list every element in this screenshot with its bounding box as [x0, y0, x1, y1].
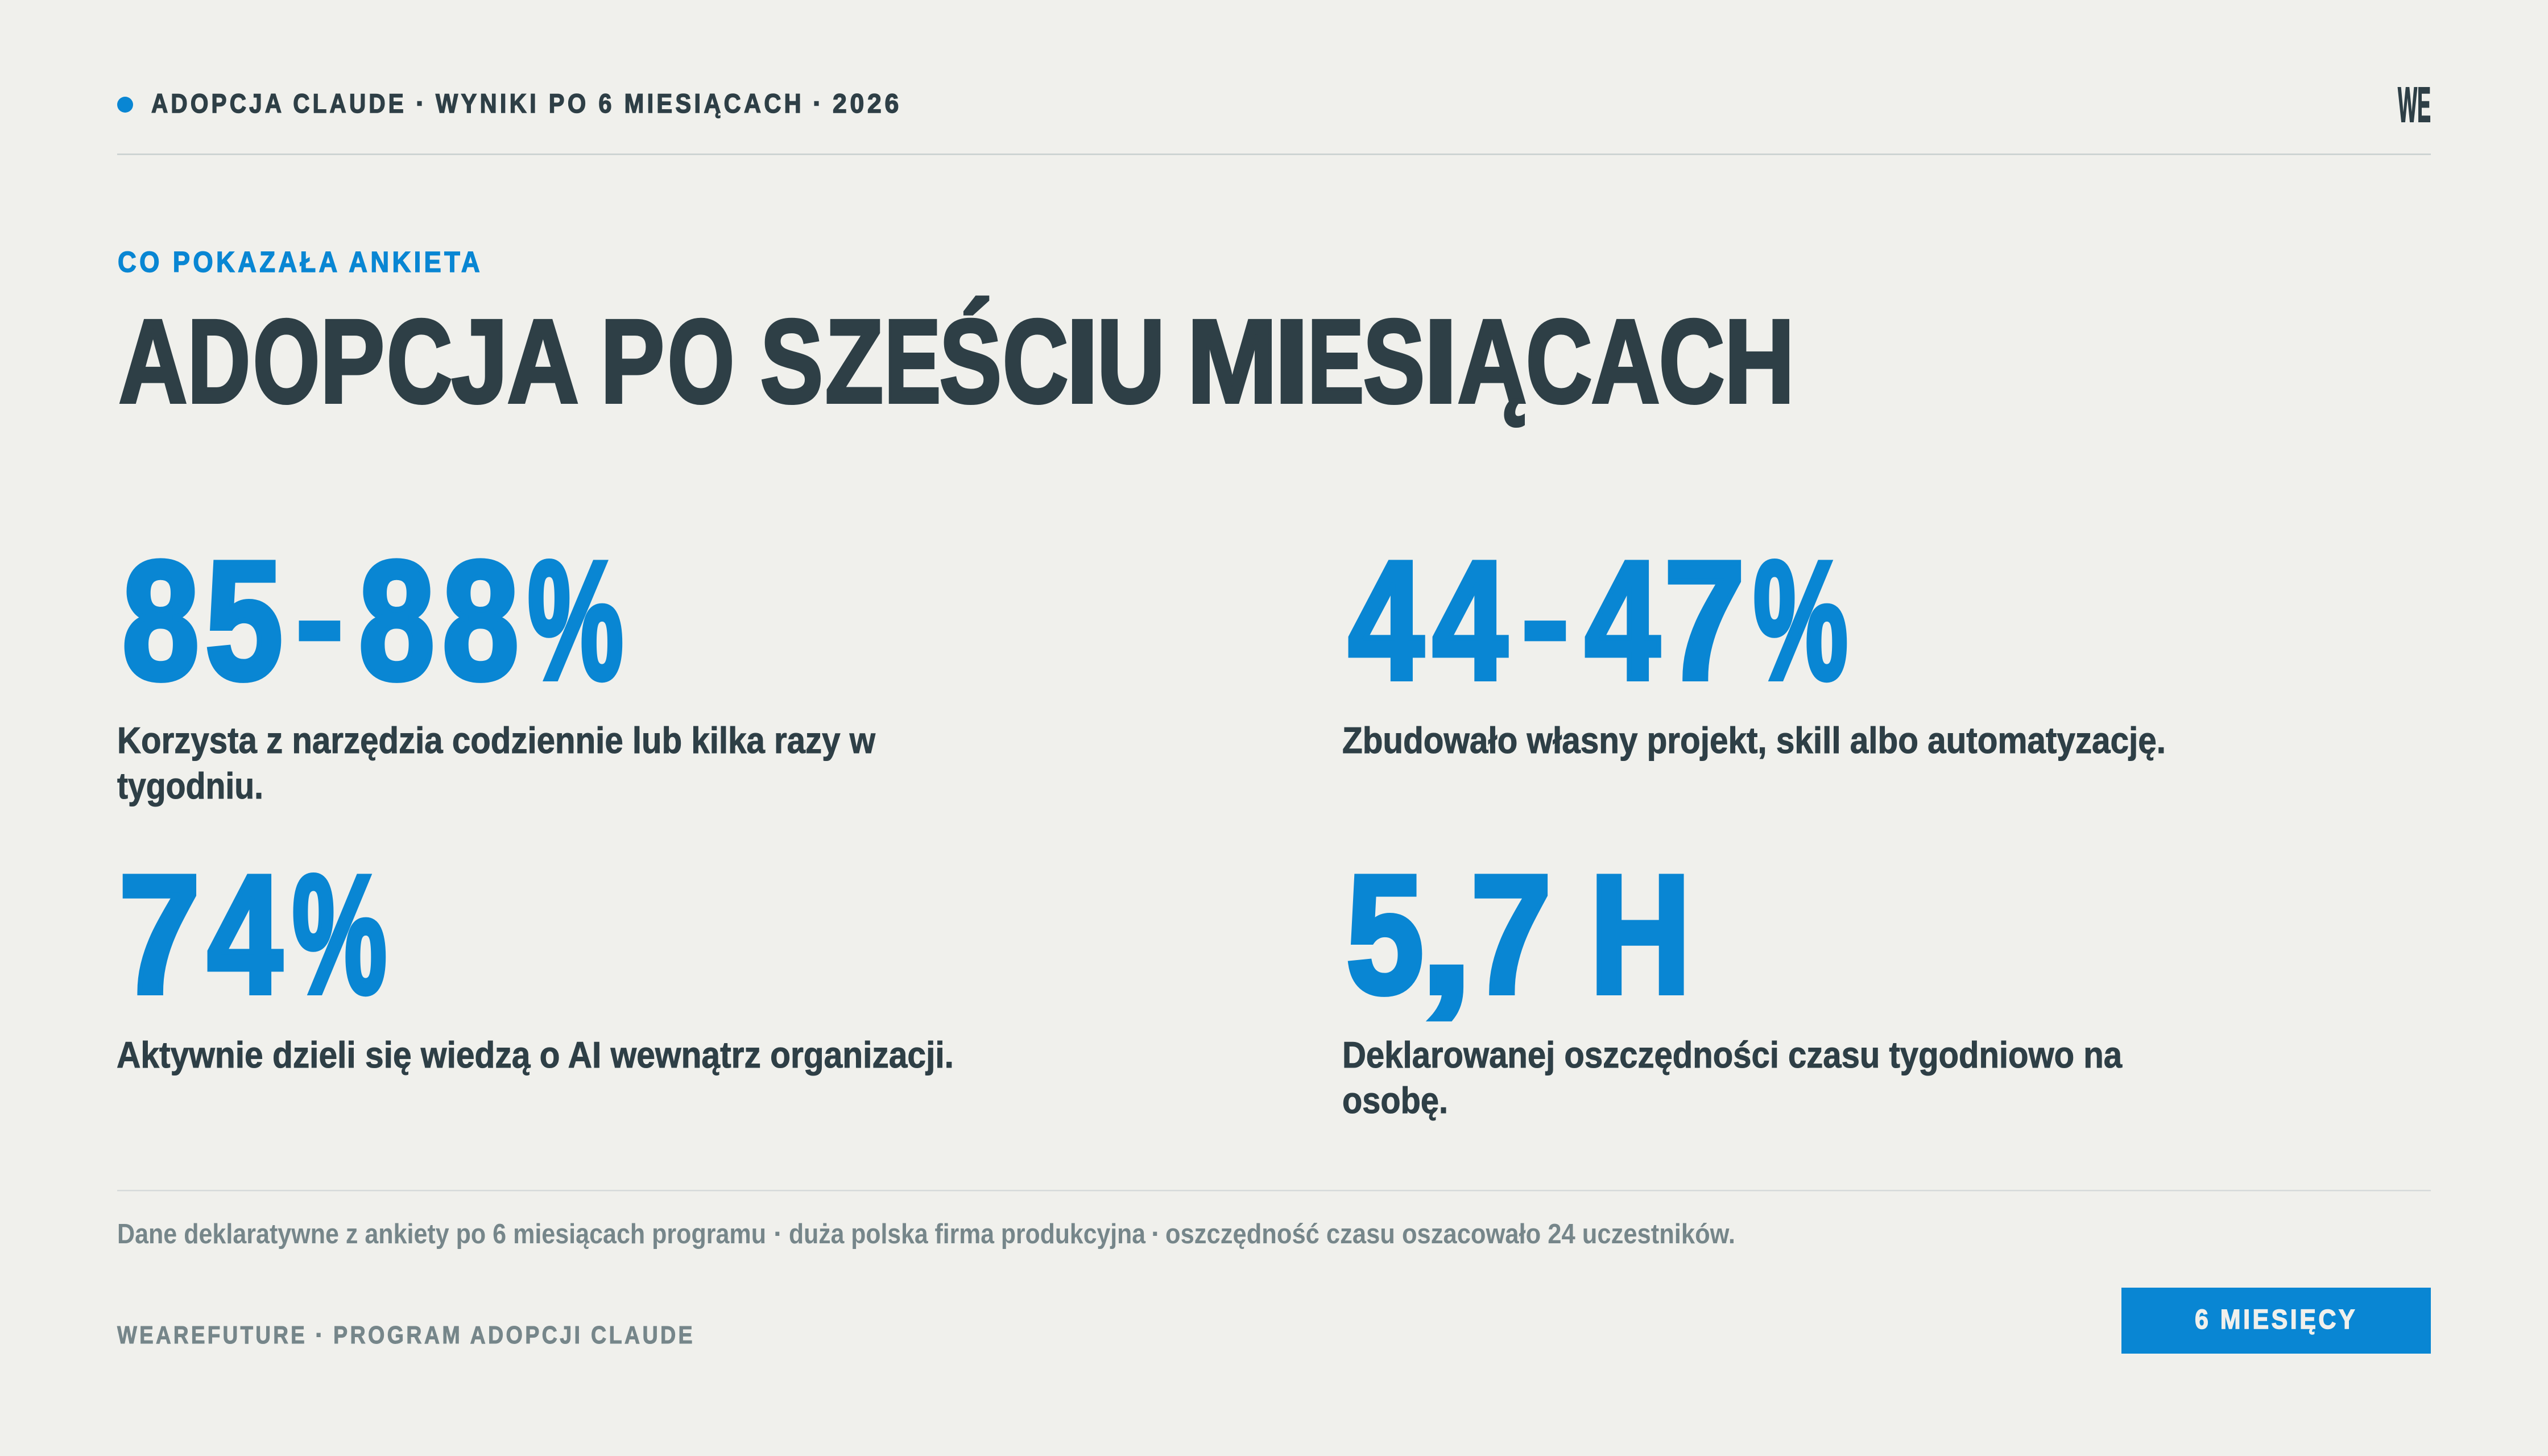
- value: 4: [1585, 526, 1660, 714]
- title: H: [1724, 296, 1794, 428]
- value: %: [528, 526, 623, 714]
- value: -: [1519, 522, 1572, 710]
- title: C: [1659, 296, 1724, 428]
- title: E: [1308, 296, 1364, 428]
- title: P: [320, 296, 384, 428]
- title: I: [1274, 296, 1309, 428]
- title: S: [1363, 296, 1425, 428]
- title: Ą: [1458, 296, 1527, 428]
- title: Z: [825, 296, 883, 428]
- value: 8: [442, 526, 519, 714]
- icon: blue dot: [117, 97, 133, 113]
- value: 7: [1664, 526, 1745, 714]
- eyebrow: CO POKAZAŁA ANKIETA: [118, 246, 483, 278]
- value: 4: [208, 840, 283, 1028]
- title: J: [452, 296, 508, 428]
- title: A: [1591, 296, 1660, 428]
- title: Ś: [940, 296, 1002, 428]
- footer label: PROGRAM ADOPCJI CLAUDE: [333, 1321, 695, 1349]
- header label: WYNIKI PO 6 MIESIĄCACH: [436, 88, 804, 118]
- value: 7: [1471, 840, 1552, 1028]
- header bar: [117, 77, 2431, 133]
- footnote: ·: [1151, 1219, 1160, 1250]
- footnote: Dane deklaratywne z ankiety po 6 miesiącach programu: [117, 1219, 766, 1250]
- title: C: [1526, 296, 1592, 428]
- footnote: duża polska firma produkcyjna: [789, 1219, 1146, 1250]
- value: 5: [1346, 840, 1424, 1028]
- value: -: [293, 522, 346, 710]
- header label: ADOPCJA CLAUDE: [151, 88, 407, 118]
- value: %: [1753, 526, 1848, 714]
- title: E: [884, 296, 941, 428]
- stat: daily usage: [117, 522, 875, 806]
- value: ,: [1420, 840, 1473, 1028]
- value: 4: [1349, 526, 1425, 714]
- header label: ·: [416, 88, 428, 118]
- description: Deklarowanej oszczędności czasu tygodniowo na: [1342, 1034, 2123, 1076]
- header label: 2026: [833, 88, 902, 118]
- footnote: ·: [774, 1219, 783, 1250]
- title: S: [760, 296, 823, 428]
- description: osobę.: [1342, 1079, 1448, 1121]
- stat: knowledge sharing: [117, 840, 954, 1076]
- title: A: [119, 296, 187, 428]
- badge: 6 months: 6 MIESIĘCY: [2195, 1305, 2357, 1335]
- stat: time saved: [1342, 840, 2123, 1121]
- value: 8: [122, 526, 199, 714]
- header label: ·: [813, 88, 825, 118]
- footer label: WEAREFUTURE: [117, 1321, 307, 1349]
- value: 4: [1433, 526, 1508, 714]
- title: O: [668, 296, 734, 428]
- title: C: [387, 296, 452, 428]
- title: I: [1066, 296, 1099, 428]
- title: M: [1187, 296, 1277, 428]
- stat: own project: [1342, 522, 2166, 761]
- title: D: [188, 296, 250, 428]
- value: 5: [205, 526, 283, 714]
- title: C: [1003, 296, 1068, 428]
- description: Korzysta z narzędzia codziennie lub kilka razy w: [117, 719, 875, 761]
- text: WE: [2398, 77, 2431, 133]
- title: O: [253, 296, 320, 428]
- description: tygodniu.: [117, 765, 263, 806]
- value: 7: [119, 840, 200, 1028]
- title: U: [1097, 296, 1165, 428]
- description: Zbudowało własny projekt, skill albo automatyzację.: [1342, 719, 2166, 761]
- value: H: [1590, 840, 1691, 1028]
- value: %: [292, 840, 387, 1028]
- badge: 6 months: [2121, 1288, 2431, 1354]
- footnote: oszczędność czasu oszacowało 24 uczestników.: [1165, 1219, 1735, 1250]
- title: P: [601, 296, 664, 428]
- footer label: ·: [315, 1321, 326, 1349]
- title: I: [1424, 296, 1458, 428]
- title: A: [507, 296, 576, 428]
- value: 8: [359, 526, 435, 714]
- description: Aktywnie dzieli się wiedzą o AI wewnątrz organizacji.: [117, 1034, 954, 1076]
